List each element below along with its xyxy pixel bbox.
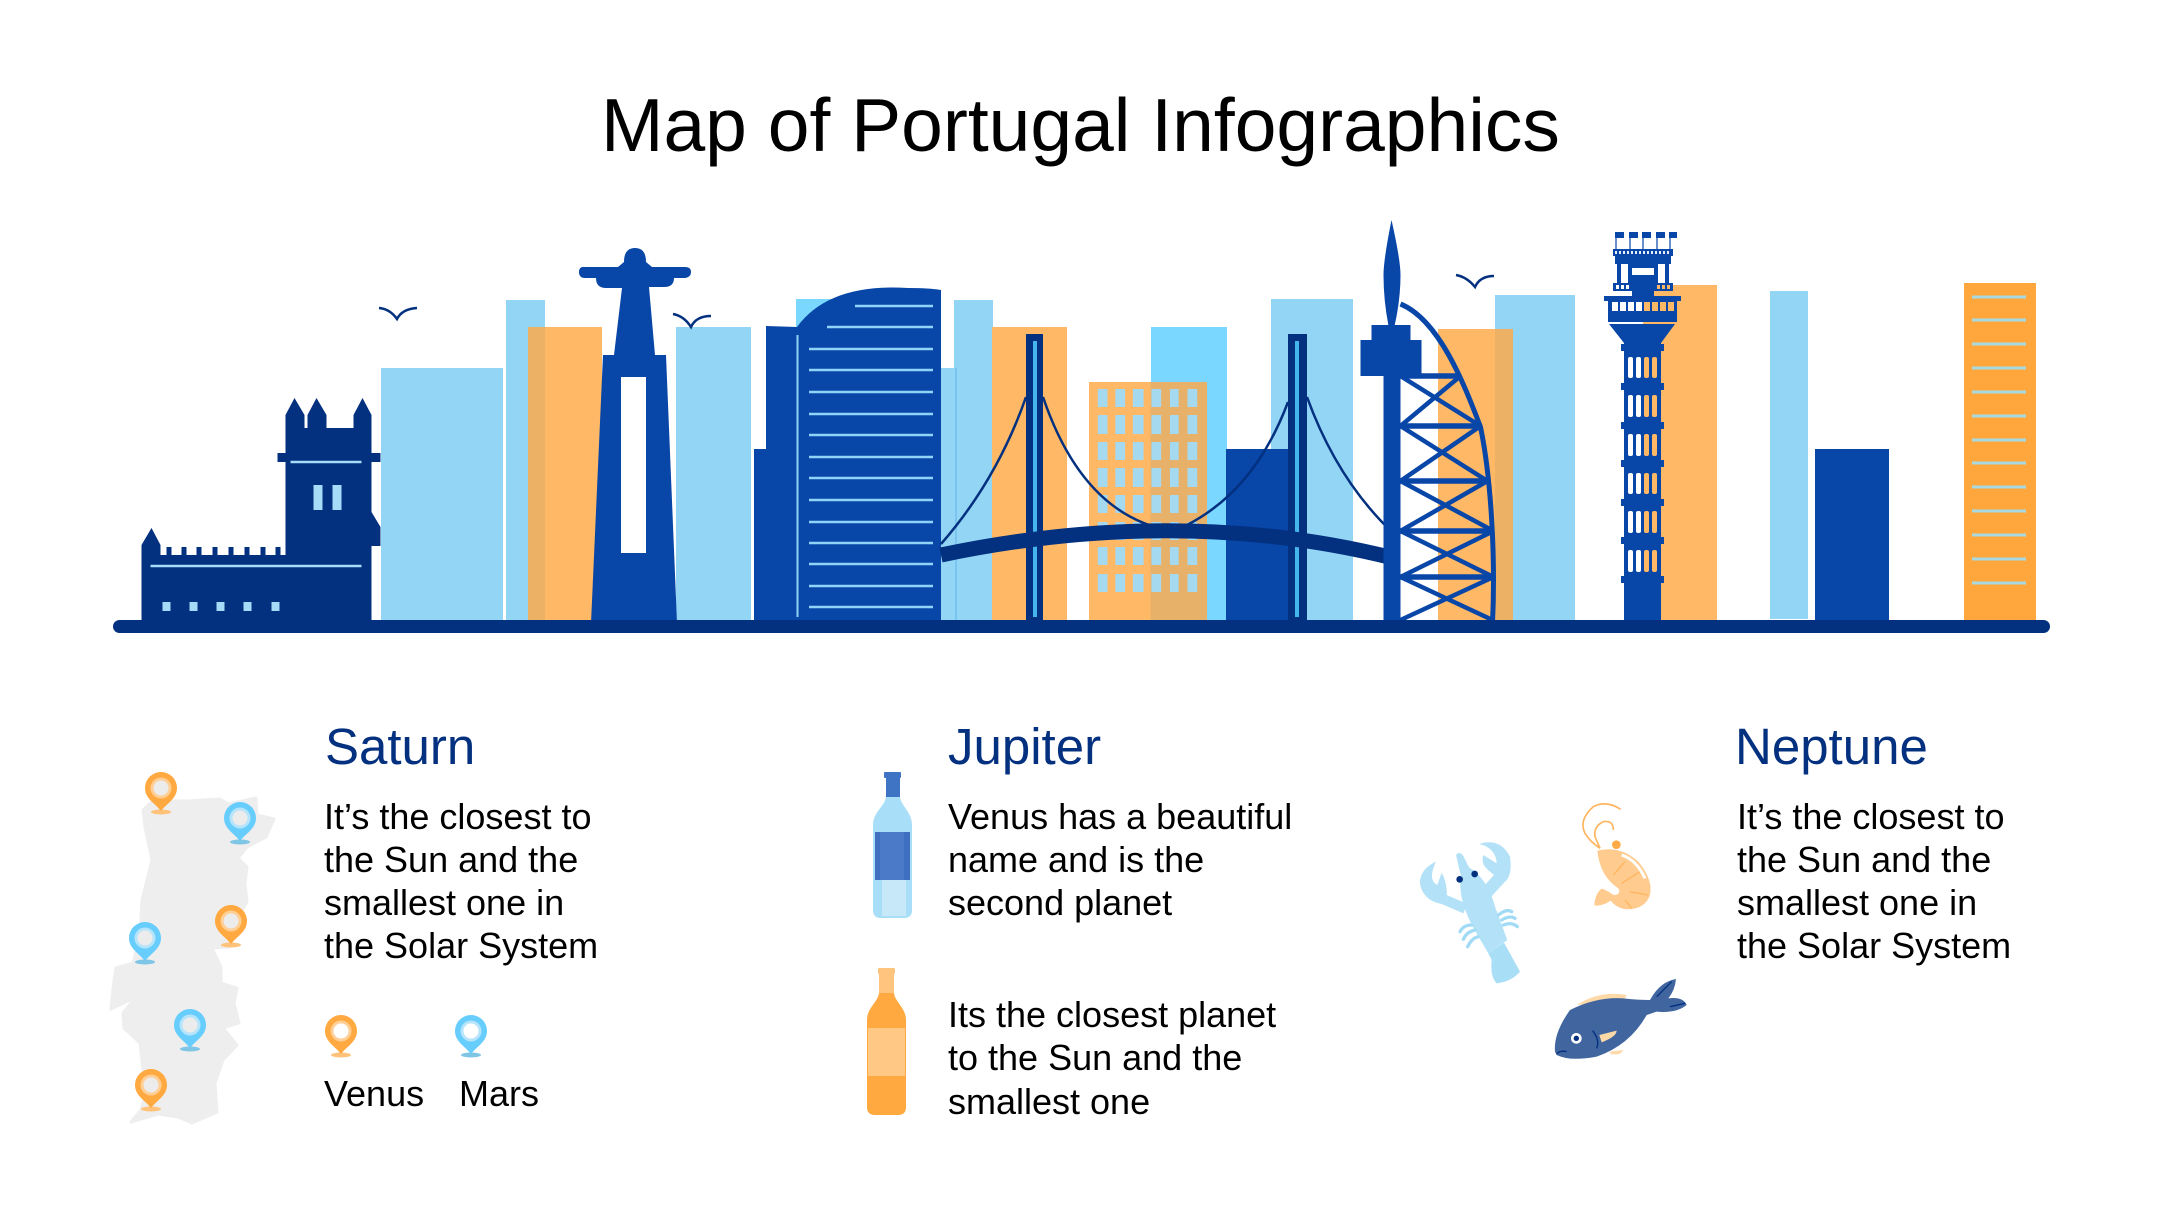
description: Neptune: smallest one in [1737, 882, 1977, 923]
panel: Saturn [111, 718, 598, 1123]
striped orange building [1964, 283, 2036, 623]
icon: orange bottle [867, 968, 906, 1115]
icon: lobster [1420, 842, 1520, 983]
description: Neptune: the Solar System [1737, 925, 2011, 966]
birds [379, 275, 1494, 327]
windowed orange building [1089, 382, 1207, 623]
heading: Jupiter: Jupiter [948, 718, 1101, 775]
icon: blue bottle [873, 772, 912, 918]
map pins [129, 772, 256, 1112]
description: Saturn: smallest one in [324, 882, 564, 923]
description: Venus: Venus has a beautiful [948, 796, 1292, 837]
description: Saturn: the Sun and the [324, 839, 578, 880]
panel: Jupiter [867, 718, 1292, 1122]
Christ the King monument [579, 248, 691, 623]
description: closest planet: Its the closest planet [948, 994, 1276, 1035]
legend: Mars [455, 1015, 539, 1114]
heading: Saturn: Saturn [325, 718, 475, 775]
Belem tower [142, 398, 380, 623]
title: Map of Portugal Infographics [601, 83, 1560, 167]
icon: shrimp [1583, 804, 1651, 909]
legend: Venus: Venus [324, 1073, 424, 1114]
description: Venus: name and is the [948, 839, 1204, 880]
description: Neptune: the Sun and the [1737, 839, 1991, 880]
heading: Neptune: Neptune [1735, 718, 1928, 775]
skyline illustration [113, 220, 2050, 633]
Vasco da Gama tower [1360, 220, 1494, 623]
description: closest planet: to the Sun and the [948, 1037, 1242, 1078]
description: closest planet: smallest one [948, 1081, 1150, 1122]
description: Venus: second planet [948, 882, 1172, 923]
blue block building [1226, 449, 1288, 623]
icon: fish [1555, 979, 1687, 1059]
curved tower [754, 287, 941, 623]
legend: Venus [324, 1015, 424, 1114]
description: Saturn: It’s the closest to [324, 796, 591, 837]
Santa Justa lift [1604, 232, 1681, 623]
map of Portugal [111, 798, 274, 1123]
description: Neptune: It’s the closest to [1737, 796, 2004, 837]
ground line [113, 620, 2050, 633]
description: Saturn: the Solar System [324, 925, 598, 966]
background buildings [381, 285, 1889, 623]
panel: Neptune [1420, 718, 2011, 1059]
legend: Mars: Mars [459, 1073, 539, 1114]
suspension bridge [941, 334, 1393, 623]
